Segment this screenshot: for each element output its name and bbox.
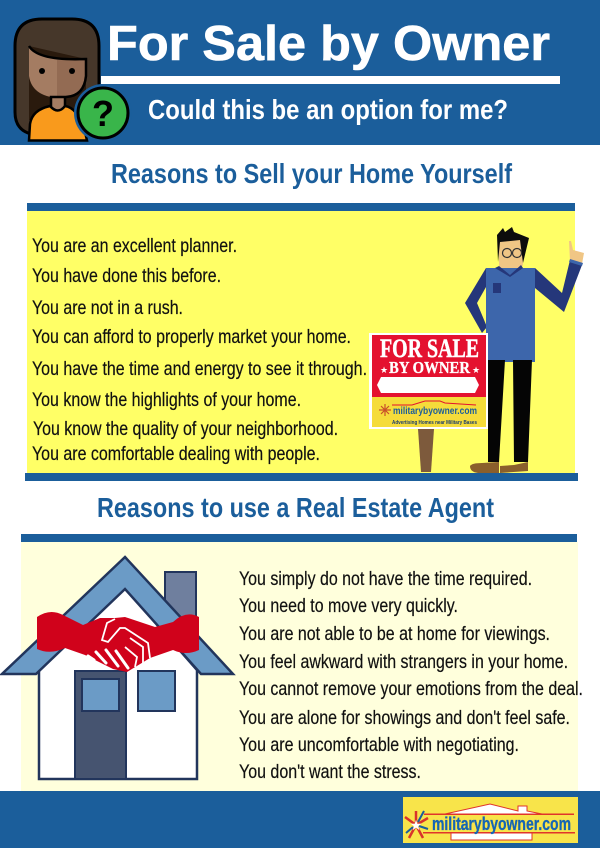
illustration: man with glasses bbox=[465, 227, 584, 473]
text block: reasons to sell list: You have done this before. bbox=[32, 265, 221, 287]
illustration: for sale sign: militarybyowner.com bbox=[393, 406, 477, 417]
text block: reasons to sell list: You are not in a rush. bbox=[32, 297, 183, 319]
panel: real estate agent bbox=[21, 534, 578, 791]
logo: militarybyowner.com: ★ bbox=[410, 817, 422, 833]
icon: woman with question mark bbox=[15, 19, 132, 142]
text block: reasons to sell list: You know the highlights of your home. bbox=[32, 389, 301, 411]
title: For Sale by Owner bbox=[107, 17, 550, 71]
icon: woman with question mark: ? bbox=[92, 93, 114, 134]
text block: reasons to use an agent list: You don't want the stress. bbox=[239, 761, 421, 783]
illustration: for sale sign: ★ bbox=[380, 365, 388, 375]
text block: reasons to sell list: You can afford to properly market your home. bbox=[32, 326, 351, 348]
logo: militarybyowner.com bbox=[403, 797, 578, 843]
text block: reasons to use an agent list: You simply do not have the time required. bbox=[239, 568, 532, 590]
title underline bbox=[101, 76, 560, 84]
text block: reasons to sell list: You are an excellent planner. bbox=[32, 235, 237, 257]
text block: reasons to sell list bbox=[32, 235, 367, 465]
illustration: for sale sign bbox=[369, 333, 488, 472]
text block: reasons to sell list: You are comfortable dealing with people. bbox=[32, 443, 320, 465]
illustration: for sale sign: BY OWNER bbox=[389, 358, 471, 377]
subtitle: Could this be an option for me? bbox=[148, 94, 508, 125]
illustration: for sale sign: FOR SALE bbox=[380, 334, 479, 363]
panel: sell yourself bbox=[25, 203, 578, 481]
header band bbox=[0, 0, 600, 145]
text block: reasons to sell list: You know the quality of your neighborhood. bbox=[33, 418, 338, 440]
text block: reasons to use an agent list: You are uncomfortable with negotiating. bbox=[239, 734, 519, 756]
text block: reasons to use an agent list: You need to move very quickly. bbox=[239, 595, 458, 617]
heading: reasons to sell: Reasons to Sell your Home Yourself bbox=[111, 158, 513, 189]
illustration: for sale sign: ★ bbox=[472, 365, 480, 375]
icon: house with handshake bbox=[2, 557, 233, 779]
text block: reasons to sell list: You have the time and energy to see it through. bbox=[32, 358, 367, 380]
heading: reasons to use an agent: Reasons to use a Real Estate Agent bbox=[97, 492, 494, 523]
text block: reasons to use an agent list bbox=[239, 568, 583, 783]
illustration: for sale sign: Advertising Homes near Military Bases bbox=[392, 420, 477, 426]
footer band bbox=[0, 791, 600, 848]
